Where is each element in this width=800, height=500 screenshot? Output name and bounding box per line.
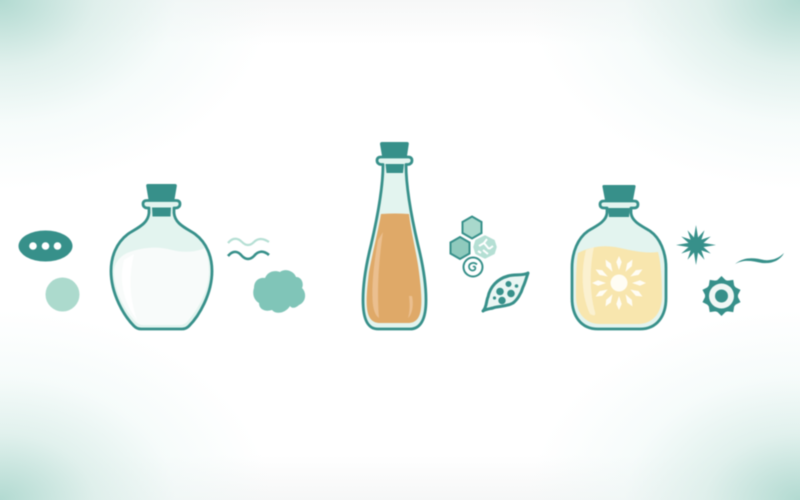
right group: flask bottle and icons — [572, 185, 784, 329]
liquid highlight right — [408, 296, 413, 318]
liquid highlight left — [372, 232, 383, 318]
cork — [380, 142, 409, 156]
icon: spiky star — [676, 225, 716, 265]
bottle glass — [363, 157, 426, 329]
inner cork — [386, 164, 404, 173]
bottle highlight — [122, 254, 137, 320]
icon: left hexagon — [450, 237, 470, 259]
cork — [602, 185, 636, 200]
icon: spiral — [464, 258, 482, 276]
liquid highlight — [583, 247, 595, 315]
icon: cloud — [253, 270, 305, 313]
bottle glass — [111, 200, 212, 329]
bottle contents: white liquid — [114, 248, 209, 325]
tall bottle — [363, 142, 426, 329]
middle group: tall bottle and icons — [363, 142, 528, 329]
icon: top hexagon — [462, 216, 482, 238]
round bottle — [111, 184, 212, 329]
left group: round bottle and icons — [18, 184, 305, 329]
sun emblem — [592, 256, 646, 310]
icon: speech bubble with dots — [18, 230, 72, 262]
icon: pale circle — [46, 278, 80, 312]
icon: seed pod — [483, 273, 528, 311]
icon: dark wave — [228, 252, 269, 259]
bottle contents: amber liquid — [367, 214, 421, 323]
bottle contents: yellow liquid — [576, 246, 662, 324]
inner cork — [608, 208, 630, 217]
inner cork — [152, 208, 171, 216]
icon: gear — [701, 276, 742, 316]
icon: patterned circle — [474, 236, 496, 258]
icon: pale wave — [228, 239, 269, 245]
cork — [146, 184, 177, 200]
bottle glass — [572, 201, 666, 329]
flask bottle — [572, 185, 666, 329]
icon: swoosh — [735, 253, 784, 264]
